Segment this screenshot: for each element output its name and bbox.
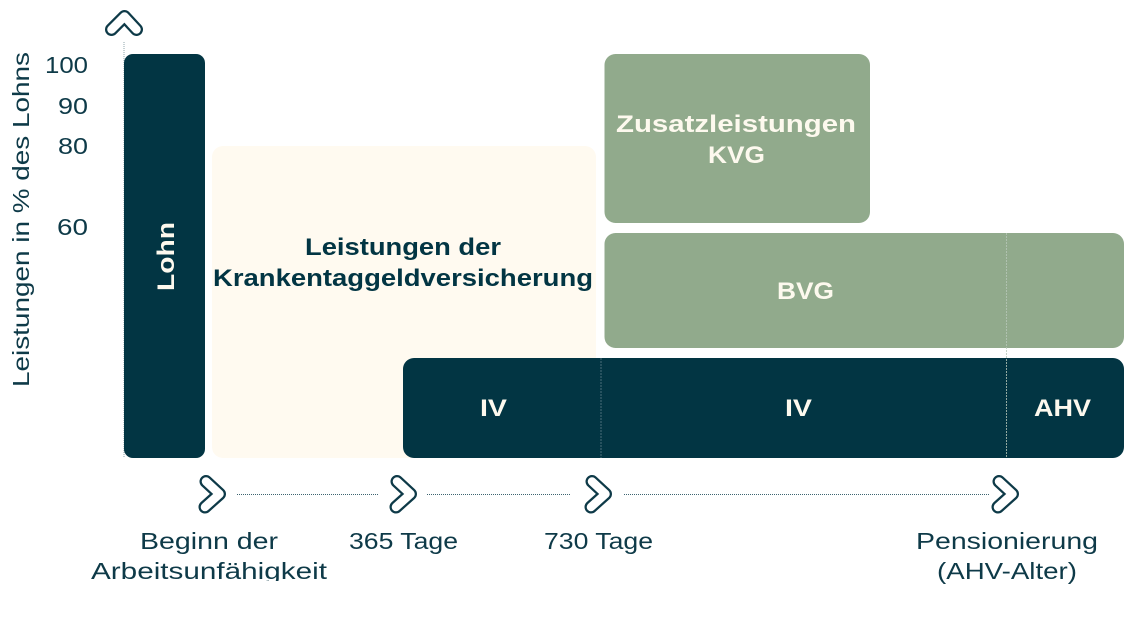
panel: BVG: BVG [777,278,834,305]
icon: up arrow [112,16,136,30]
label: Pensionierung: Pensionierung [916,528,1098,554]
label: 365 Tage: 365 Tage [349,528,458,554]
label: Beginn der Arbeitsunfähigkeit [91,532,327,581]
timeline dotted segment [624,494,990,496]
bar: Lohn: Lohn [153,222,180,291]
icon: arrow 365 [396,482,410,507]
bar: Lohn [124,54,205,458]
vertical marker at 730 Tage [600,358,602,458]
label: Beginn der Arbeitsunfähigkeit: Beginn der [140,528,278,554]
y axis values: 60 [57,214,88,240]
icon: arrow start [205,482,220,507]
bar: IV and AHV: AHV [1034,395,1091,422]
panel: Krankentaggeld: Leistungen der [305,234,501,261]
label: Pensionierung: (AHV-Alter) [937,558,1077,584]
timeline dotted segment [237,494,378,496]
label: Pensionierung [916,528,1098,584]
y axis values: 80 [58,133,88,159]
panel: Zusatzleistungen KVG: Zusatzleistungen [616,111,856,138]
y axis values: 100 [45,52,88,78]
timeline dotted segment [427,494,570,496]
bar: IV and AHV: IV [785,395,812,422]
label: 730 Tage: 730 Tage [544,528,653,554]
bar: IV and AHV [403,358,1124,458]
panel: Zusatzleistungen KVG: KVG [708,142,765,169]
label: Beginn der Arbeitsunfähigkeit: Arbeitsunfähigkeit [91,558,328,584]
vertical marker at Pensionierung [1006,233,1008,458]
icon: arrow pension [998,482,1012,507]
panel: BVG [604,233,1124,348]
y axis values: 90 [58,93,88,119]
y axis title: Leistungen in % des Lohns [8,52,34,387]
bar: IV and AHV: IV [480,395,507,422]
y axis values [45,52,88,240]
icon: arrow 730 [591,482,606,507]
panel: Zusatzleistungen KVG [604,54,870,223]
panel: Krankentaggeld [212,146,596,458]
y axis dotted line [123,42,125,458]
panel: Krankentaggeld: Krankentaggeldversicherung [213,265,593,292]
